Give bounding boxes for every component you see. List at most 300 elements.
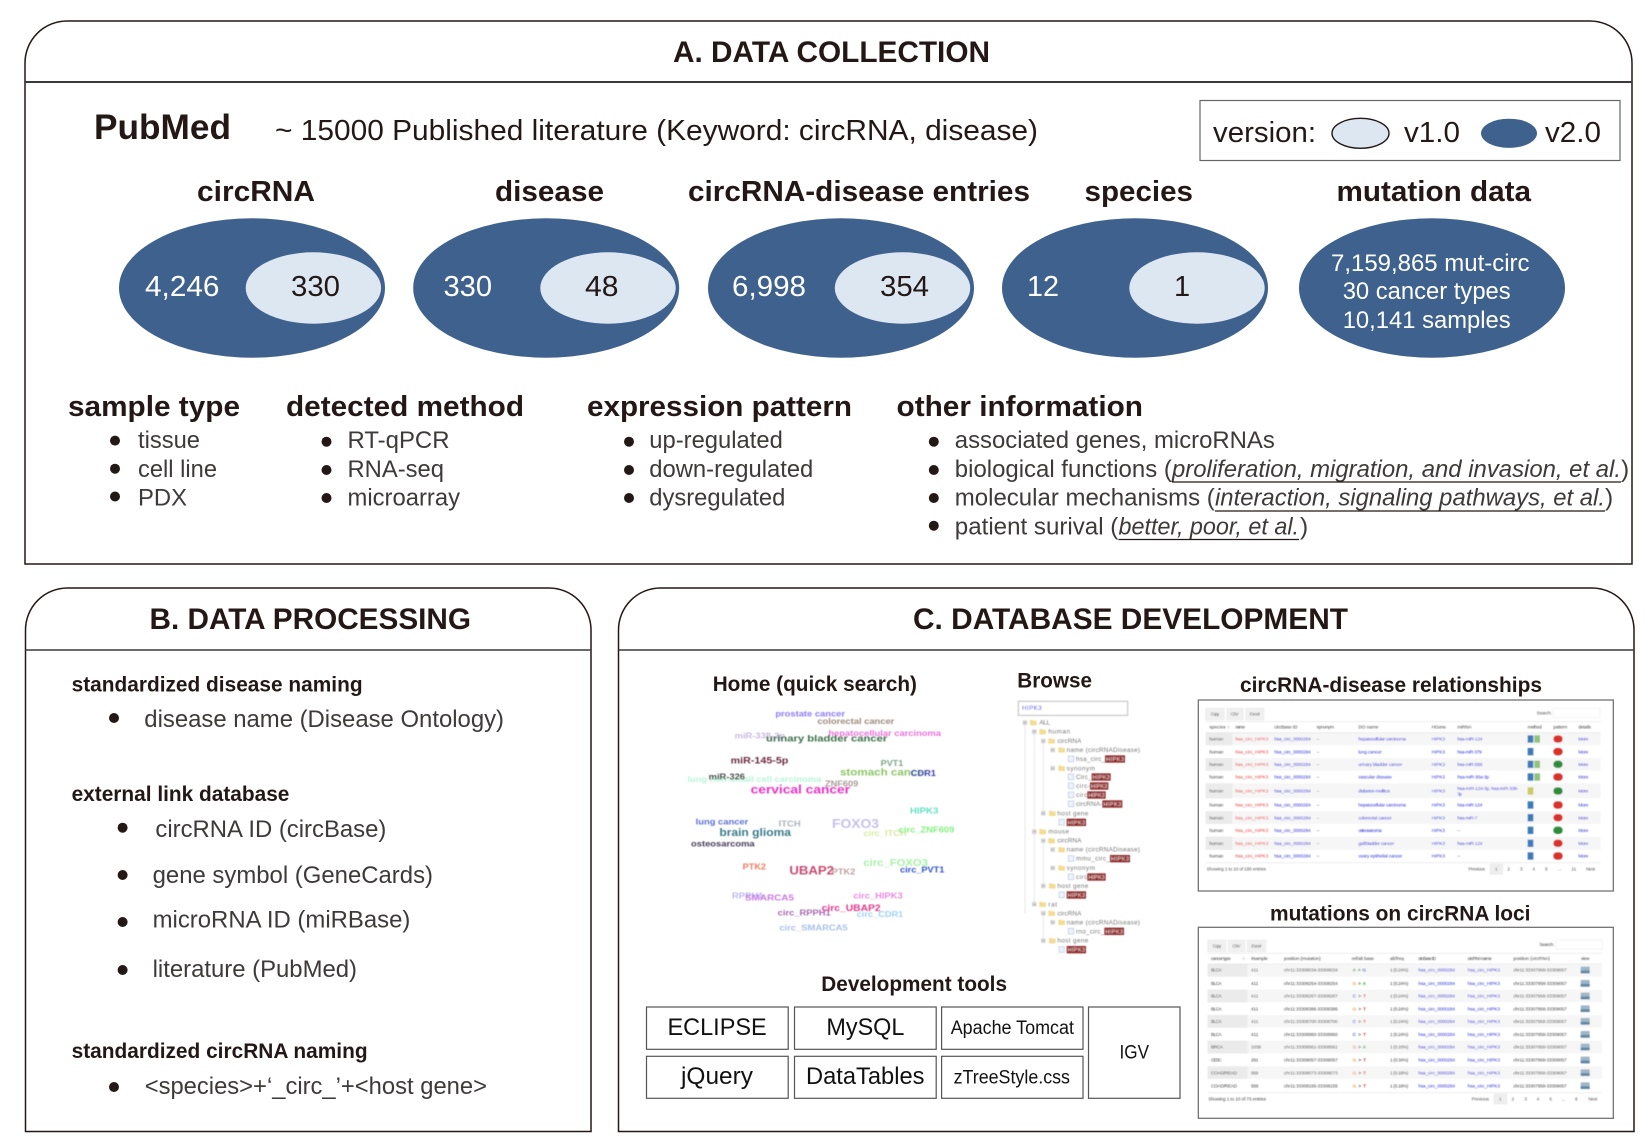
word cloud: PVT1 — [881, 758, 904, 768]
table screenshot: circRNA-disease relationships: hsa-miR-124 — [1457, 803, 1483, 808]
table screenshot: circRNA-disease relationships: human — [1209, 803, 1224, 808]
list: other information: biological functions ( — [955, 456, 1173, 483]
table screenshot: mutations on circRNA loci: hsa_circ_HIPK3 — [1468, 1045, 1500, 1050]
browse tree screenshot: HIPK3 — [1022, 705, 1042, 712]
word cloud: stomach cancer — [840, 767, 928, 778]
table screenshot: circRNA-disease relationships: More — [1578, 762, 1589, 767]
list: other information: interaction, signaling pathways, et al. — [1215, 484, 1605, 512]
stat: mutation data: 10,141 samples — [1343, 307, 1511, 334]
table screenshot: mutations on circRNA loci: BLCA — [1211, 994, 1223, 999]
heading: circRNA-disease relationships: circRNA-disease relationships — [1240, 674, 1542, 697]
panel A frame — [25, 21, 1632, 564]
table screenshot: mutations on circRNA loci: 1 (0.24%) — [1390, 1006, 1409, 1011]
table screenshot: mutations on circRNA loci: C > T — [1353, 1019, 1366, 1024]
table screenshot: circRNA-disease relationships: More — [1578, 854, 1589, 859]
table screenshot: mutations on circRNA loci: hsa_circ_HIPK3 — [1468, 994, 1500, 999]
table screenshot: circRNA-disease relationships: – — [1457, 828, 1460, 833]
table screenshot: mutations on circRNA loci: BLCA — [1211, 981, 1223, 986]
table screenshot: mutations on circRNA loci: G > T — [1353, 1070, 1366, 1075]
browse tree screenshot: circ — [1076, 874, 1087, 881]
table screenshot: circRNA-disease relationships: 11 — [1571, 866, 1577, 871]
list: expression pattern: down-regulated — [649, 456, 813, 483]
legend: version: version: — [1213, 117, 1316, 149]
word cloud: miR-145-5p — [731, 755, 789, 765]
panel: A. data collection — [25, 21, 1632, 564]
browse tree screenshot: circRNA — [1057, 838, 1082, 845]
table screenshot: mutations on circRNA loci: chr11:33308267-33308267 — [1284, 994, 1338, 999]
stat: circRNA-disease entries: circRNA-disease entries — [688, 176, 1030, 208]
table screenshot: mutations on circRNA loci: Excel — [1251, 943, 1261, 948]
table screenshot: circRNA-disease relationships: More — [1578, 775, 1589, 780]
browse tree screenshot: host gene — [1057, 938, 1089, 945]
word cloud: brain glioma — [719, 827, 791, 839]
list: expression pattern: up-regulated — [649, 427, 783, 454]
browse tree screenshot: name (circRNADisease) — [1067, 847, 1140, 854]
table screenshot: circRNA-disease relationships: – — [1317, 775, 1320, 780]
stat: circRNA-disease entries: 354 — [880, 271, 929, 303]
tool labels: ECLIPSE — [668, 1014, 767, 1041]
table screenshot: mutations on circRNA loci: hsa_circ_HIPK3 — [1468, 1070, 1500, 1075]
table screenshot: circRNA-disease relationships: human — [1209, 762, 1224, 767]
word cloud: hepatocellular carcinoma — [828, 729, 942, 738]
word cloud: circ_UBAP2 — [822, 903, 881, 913]
list: other information: molecular mechanisms ( — [955, 484, 1216, 512]
stat: disease: 48 — [585, 271, 618, 303]
list: sample type: PDX — [138, 484, 187, 512]
table screenshot: mutations on circRNA loci: 559 — [1251, 1070, 1259, 1075]
table screenshot: mutations on circRNA loci: hsa_circ_0000284 — [1418, 981, 1455, 986]
table screenshot: circRNA-disease relationships: hsa_circ_HIPK3 — [1235, 749, 1269, 754]
stat: mutation data: 30 cancer types — [1343, 278, 1511, 305]
table screenshot: circRNA-disease relationships: hsa_circ_HIPK3 — [1235, 815, 1269, 820]
table screenshot: mutations on circRNA loci: hsa_circ_0000284 — [1418, 1019, 1455, 1024]
table screenshot: circRNA-disease relationships: miRNA — [1457, 724, 1473, 729]
list: other information — [896, 391, 1629, 540]
table screenshot: circRNA-disease relationships: More — [1578, 828, 1589, 833]
table screenshot: mutations on circRNA loci: G > A — [1353, 1045, 1367, 1050]
table screenshot: circRNA-disease relationships: – — [1317, 749, 1320, 754]
browse tree screenshot: host gene — [1057, 810, 1089, 817]
word cloud: SMARCA5 — [745, 893, 794, 903]
table screenshot: mutations on circRNA loci: 1 (0.24%) — [1390, 994, 1409, 999]
stat: circRNA: 330 — [291, 271, 340, 303]
word cloud: cervical cancer — [751, 782, 850, 796]
table screenshot: mutations on circRNA loci: 1 — [1499, 1096, 1502, 1101]
table screenshot: circRNA-disease relationships: 3p — [1457, 791, 1462, 796]
browse tree screenshot: HIPK3 — [1105, 929, 1123, 935]
table screenshot: circRNA-disease relationships: HGene — [1432, 724, 1446, 729]
group: standardized circRNA naming: <species>+‘_circ_’+<host gene> — [145, 1073, 487, 1100]
table screenshot: mutations on circRNA loci: 1 (0.24%) — [1390, 981, 1409, 986]
table screenshot: mutations on circRNA loci: position (mutation) — [1284, 956, 1321, 961]
table screenshot: circRNA-disease relationships: human — [1209, 789, 1224, 794]
word cloud: lung cancer — [696, 818, 748, 827]
table screenshot: mutations on circRNA loci: C > T — [1353, 1032, 1366, 1037]
table screenshot: circRNA-disease relationships: hsa_circ_0000284 — [1274, 854, 1311, 859]
table screenshot: mutations on circRNA loci: 411 — [1251, 981, 1259, 986]
table screenshot: mutations on circRNA loci: hsa_circ_HIPK3 — [1468, 1083, 1500, 1088]
table screenshot: mutations on circRNA loci: COAD/READ — [1211, 1070, 1238, 1075]
list: sample type: tissue — [138, 427, 200, 454]
table screenshot: circRNA-disease relationships: 5 — [1545, 866, 1548, 871]
word cloud: PTK2 — [743, 862, 766, 872]
table screenshot: circRNA-disease relationships: HIPK3 — [1432, 854, 1445, 859]
list: sample type: sample type — [68, 391, 240, 423]
table screenshot: mutations on circRNA loci: Search: — [1539, 942, 1554, 947]
table screenshot: circRNA-disease relationships: Next — [1586, 866, 1596, 871]
group: standardized disease naming: standardized disease naming — [72, 674, 363, 696]
table screenshot: circRNA-disease relationships: – — [1457, 854, 1460, 859]
table screenshot: circRNA-disease relationships: 2 — [1507, 866, 1510, 871]
word cloud: circ_HIPK3 — [853, 892, 903, 901]
browse tree screenshot: hsa_circ_ — [1076, 756, 1105, 763]
table screenshot: mutations on circRNA loci: G > T — [1353, 1058, 1366, 1063]
legend: version: v1.0 — [1404, 117, 1460, 149]
list: expression pattern: expression pattern — [587, 391, 852, 423]
word cloud — [687, 710, 955, 932]
group: standardized circRNA naming — [72, 1040, 487, 1100]
literature summary: ~ 15000 Published literature (Keyword: circRNA, disease) — [275, 115, 1038, 147]
table screenshot: mutations on circRNA loci: 411 — [1251, 968, 1259, 973]
table screenshot: mutations on circRNA loci: hsa_circ_HIPK3 — [1468, 1032, 1500, 1037]
group: external link database — [72, 783, 433, 983]
browse tree screenshot: rat — [1048, 901, 1057, 908]
table screenshot: circRNA-disease relationships: 1 — [1495, 866, 1498, 871]
word cloud: UBAP2 — [789, 864, 834, 878]
table screenshot: circRNA-disease relationships: HIPK3 — [1432, 803, 1445, 808]
group: standardized disease naming: disease name (Disease Ontology) — [144, 706, 504, 733]
table screenshot: mutations on circRNA loci: hsa_circ_0000284 — [1418, 1083, 1455, 1088]
table screenshot: mutations on circRNA loci: Copy — [1213, 943, 1222, 948]
table screenshot: mutations on circRNA loci: 1039 — [1251, 1045, 1261, 1050]
table screenshot: circRNA-disease relationships: ... — [1558, 866, 1562, 871]
table screenshot: mutations on circRNA loci: 411 — [1251, 1006, 1259, 1011]
table screenshot: mutations on circRNA loci: hsa_circ_HIPK3 — [1468, 968, 1500, 973]
browse tree screenshot: mmu_circ_ — [1076, 856, 1110, 863]
table screenshot: mutations on circRNA loci: hsa_circ_HIPK3 — [1468, 1058, 1500, 1063]
browse tree screenshot: circ- — [1076, 783, 1090, 790]
table screenshot: circRNA-disease relationships: – — [1317, 737, 1320, 742]
table screenshot: mutations on circRNA loci: chr11:33307958-33309057 — [1513, 1006, 1567, 1011]
list: detected method: RNA-seq — [348, 456, 444, 483]
heading: Browse: Browse — [1017, 668, 1092, 692]
table screenshot: mutations on circRNA loci: ref/alt base — [1352, 956, 1374, 961]
table screenshot: mutations on circRNA loci: BLCA — [1211, 1006, 1223, 1011]
table screenshot: circRNA-disease relationships: hsa_circ_0000284 — [1274, 775, 1311, 780]
table screenshot: circRNA-disease relationships: name — [1235, 724, 1245, 729]
list: sample type: cell line — [138, 456, 217, 483]
panel C frame — [618, 588, 1634, 1132]
table screenshot: mutations on circRNA loci: 559 — [1251, 1083, 1259, 1088]
list: detected method — [286, 391, 524, 512]
table screenshot: circRNA-disease relationships: species ↑ — [1209, 724, 1229, 729]
table screenshot: circRNA-disease relationships: More — [1578, 749, 1589, 754]
stat: mutation data: 7,159,865 mut-circ — [1331, 250, 1530, 277]
heading: mutations on circRNA loci: mutations on circRNA loci — [1270, 902, 1530, 926]
browse tree screenshot: HIPK3 — [1106, 757, 1124, 763]
table screenshot: circRNA-disease relationships: human — [1209, 737, 1224, 742]
table screenshot: circRNA-disease relationships: details — [1578, 724, 1592, 729]
browse tree screenshot: ALL — [1039, 720, 1050, 727]
table screenshot: circRNA-disease relationships: HIPK3 — [1432, 789, 1445, 794]
table screenshot: mutations on circRNA loci: hsa_circ_0000284 — [1418, 994, 1455, 999]
table screenshot: circRNA-disease relationships: HIPK3 — [1432, 749, 1445, 754]
table screenshot: mutations on circRNA loci: chr11:33308960-33308960 — [1284, 1032, 1338, 1037]
table screenshot: circRNA-disease relationships: hsa_circ_HIPK3 — [1235, 775, 1269, 780]
group: external link database: literature (PubMed) — [153, 956, 357, 983]
table screenshot: mutations on circRNA loci: hsa_circ_HIPK3 — [1468, 1006, 1500, 1011]
table screenshot: mutations on circRNA loci: Previous — [1472, 1096, 1490, 1101]
table screenshot: mutations on circRNA loci: 411 — [1251, 1032, 1259, 1037]
table screenshot: circRNA-disease relationships: – — [1317, 815, 1320, 820]
table screenshot: mutations on circRNA loci: chr11:33307958-33309057 — [1513, 968, 1567, 973]
table screenshot: mutations on circRNA loci: ↑ — [1243, 956, 1245, 961]
table screenshot: mutations on circRNA loci: chr11:33308073-33308073 — [1284, 1070, 1338, 1075]
table screenshot: mutations on circRNA loci: 291 — [1251, 1058, 1259, 1063]
table screenshot: circRNA-disease relationships: hsa-miR-30a-3p — [1457, 775, 1489, 780]
table screenshot: circRNA-disease relationships: hsa_circ_HIPK3 — [1235, 803, 1269, 808]
table screenshot: circRNA-disease relationships: DO name — [1358, 724, 1379, 729]
browse tree screenshot: circRNA- — [1076, 801, 1102, 808]
table screenshot: circRNA-disease relationships: HIPK3 — [1432, 762, 1445, 767]
tool labels: zTreeStyle.css — [954, 1068, 1070, 1088]
word cloud: miR-326 — [709, 772, 746, 781]
table screenshot: mutations on circRNA loci: #sample — [1251, 956, 1268, 961]
browse tree screenshot: HIPK3 — [1091, 784, 1107, 790]
table screenshot: mutations on circRNA loci: chr11:33307958-33309057 — [1513, 1058, 1567, 1063]
group: standardized disease naming — [72, 674, 504, 733]
table screenshot: circRNA-disease relationships: vascular disease — [1358, 775, 1392, 780]
browse tree screenshot: Circ_ — [1076, 774, 1092, 781]
table screenshot: mutations on circRNA loci: chr11:33308700-33308700 — [1284, 1019, 1338, 1024]
table screenshot: circRNA-disease relationships: hsa-miR-379 — [1457, 749, 1482, 754]
browse tree screenshot: circRNA — [1057, 738, 1082, 745]
browse tree screenshot: HIPK3 — [1111, 857, 1129, 863]
table screenshot: circRNA-disease relationships: hsa_circ_0000284 — [1274, 815, 1311, 820]
table screenshot: mutations on circRNA loci: ... — [1561, 1096, 1565, 1101]
table screenshot: mutations on circRNA loci: C > T — [1353, 994, 1366, 999]
table screenshot: circRNA-disease relationships: hsa-miR-124 — [1457, 737, 1483, 742]
word cloud: circ_CDR1 — [857, 910, 904, 919]
word cloud: circ_ITCH — [863, 829, 907, 838]
table screenshot: mutations on circRNA loci: hsa_circ_0000284 — [1418, 1006, 1455, 1011]
table screenshot: mutations on circRNA loci: 411 — [1251, 994, 1259, 999]
word cloud: RPPH1 — [732, 892, 764, 901]
table screenshot: circRNA-disease relationships: hsa-miR-558 — [1457, 762, 1483, 767]
table screenshot: mutations on circRNA loci: chr11:33307958-33309057 — [1513, 981, 1567, 986]
table screenshot: mutations on circRNA loci: 4 — [1537, 1096, 1540, 1101]
table screenshot: mutations on circRNA loci: chr11:33307958-33309057 — [1513, 1070, 1567, 1075]
stat: circRNA: 4,246 — [145, 271, 220, 303]
list: other information: better, poor, et al. — [1118, 514, 1299, 540]
table screenshot: mutations on circRNA loci: hsa_circ_0000284 — [1418, 1070, 1455, 1075]
table screenshot: circRNA-disease relationships: hsa_circ_0000284 — [1274, 749, 1311, 754]
browse tree screenshot: HIPK3 — [1088, 875, 1105, 881]
table screenshot: circRNA-disease relationships: – — [1317, 762, 1320, 767]
browse tree screenshot: host gene — [1057, 883, 1089, 890]
tool boxes — [646, 1007, 1180, 1098]
browse tree screenshot: circRNA — [1057, 910, 1082, 917]
word cloud: circ_FOXO3 — [863, 858, 928, 869]
panel B frame — [26, 588, 591, 1132]
table screenshot: mutations on circRNA loci: 1 (0.34%) — [1390, 1058, 1409, 1063]
table screenshot: mutations on circRNA loci: chr11:33307958-33309057 — [1513, 1045, 1567, 1050]
word cloud: osteosarcoma — [691, 840, 755, 849]
table screenshot: circRNA-disease relationships: method — [1528, 724, 1542, 729]
table screenshot: mutations on circRNA loci: 1 (0.24%) — [1390, 968, 1409, 973]
table screenshot: circRNA-disease relationships: human — [1209, 828, 1224, 833]
heading: A. DATA COLLECTION: A. DATA COLLECTION — [673, 36, 990, 69]
table screenshot: mutations on circRNA loci: 1 (0.18%) — [1390, 1070, 1409, 1075]
group: external link database: external link database — [72, 783, 289, 806]
table screenshot: mutations on circRNA loci: cancer type — [1211, 956, 1231, 961]
list: other information: other information — [896, 391, 1143, 423]
list: other information: ) — [1621, 456, 1629, 483]
table screenshot: mutations on circRNA loci: alt/freq — [1390, 956, 1404, 961]
table screenshot: circRNA-disease relationships: hsa_circ_HIPK3 — [1235, 841, 1269, 846]
table screenshot: circRNA-disease relationships: – — [1317, 854, 1320, 859]
table screenshot: mutations on circRNA loci: BLCA — [1211, 1019, 1223, 1024]
list: other information: ) — [1300, 514, 1308, 540]
table screenshot: circRNA-disease relationships: human — [1209, 775, 1224, 780]
stat: circRNA: circRNA — [197, 176, 315, 208]
table screenshot: mutations on circRNA loci: chr11:33308561-33308561 — [1284, 1045, 1338, 1050]
browse tree screenshot: HIPK3 — [1103, 802, 1121, 808]
word cloud: miR-338-3p — [735, 732, 785, 741]
list: expression pattern: dysregulated — [649, 484, 785, 512]
table screenshot: circRNA-disease relationships: urinary bladder cancer — [1358, 762, 1403, 767]
word cloud: CDR1 — [911, 769, 937, 778]
panel: B. data processing — [26, 588, 591, 1132]
browse tree screenshot: synonym — [1067, 765, 1095, 772]
table screenshot: circRNA-disease relationships: Excel — [1250, 712, 1260, 717]
table screenshot: circRNA-disease relationships: More — [1578, 803, 1589, 808]
table screenshot: circRNA-disease relationships: hsa_circ_HIPK3 — [1235, 789, 1269, 794]
table screenshot: circRNA-disease relationships: gallbladder cancer — [1358, 841, 1395, 846]
stat: disease: 330 — [444, 271, 492, 303]
table screenshot: circRNA-disease relationships: hsa_circ_0000284 — [1274, 789, 1311, 794]
stat: mutation data: mutation data — [1336, 176, 1532, 208]
word cloud: ITCH — [779, 819, 801, 828]
stat: circRNA-disease entries — [688, 176, 1030, 358]
table screenshot: circRNA-disease relationships: colorectal cancer — [1358, 815, 1392, 820]
table screenshot: circRNA-disease relationships: HIPK3 — [1432, 841, 1445, 846]
list: detected method: microarray — [348, 484, 461, 512]
table screenshot: mutations on circRNA loci: BLCA — [1211, 1032, 1223, 1037]
table screenshot: circRNA-disease relationships: – — [1317, 841, 1320, 846]
table screenshot: mutations on circRNA loci: circRNA name — [1468, 956, 1492, 961]
browse tree screenshot: HIPK3 — [1068, 820, 1085, 826]
table screenshot: circRNA-disease relationships: osteosarcoma — [1358, 828, 1382, 833]
stat: circRNA — [119, 176, 385, 358]
legend: version: v2.0 — [1545, 117, 1601, 149]
table screenshot: circRNA-disease relationships: HIPK3 — [1432, 775, 1445, 780]
table screenshot: mutations on circRNA loci: 2 — [1512, 1096, 1515, 1101]
browse tree screenshot: HIPK3 — [1088, 793, 1105, 799]
table screenshot: circRNA-disease relationships: CSV — [1231, 712, 1240, 717]
browse tree screenshot: mouse — [1048, 829, 1069, 836]
tool labels: Apache Tomcat — [951, 1018, 1075, 1039]
table screenshot: mutations on circRNA loci: chr11:33307958-33309057 — [1513, 1032, 1567, 1037]
table screenshot: mutations on circRNA loci: 3 — [1524, 1096, 1527, 1101]
table screenshot: mutations on circRNA loci: 1 (0.24%) — [1390, 1032, 1409, 1037]
table screenshot: circRNA-disease relationships: circBase ID — [1274, 724, 1298, 729]
word cloud: colorectal cancer — [817, 717, 894, 726]
browse tree screenshot: synonym — [1067, 865, 1095, 872]
stat: species: species — [1084, 176, 1193, 208]
table screenshot: mutations on circRNA loci: Showing 1 to 10 of 73 entries — [1208, 1096, 1267, 1101]
group: external link database: circRNA ID (circBase) — [155, 816, 386, 843]
table screenshot: circRNA-disease relationships: hsa_circ_0000284 — [1274, 803, 1311, 808]
list: other information: associated genes, microRNAs — [955, 427, 1275, 454]
table screenshot: mutations on circRNA loci: chr11:33308057-33308057 — [1284, 1058, 1338, 1063]
table screenshot: circRNA-disease relationships: lung cancer — [1358, 749, 1382, 754]
group: external link database: microRNA ID (miRBase) — [153, 907, 410, 934]
table screenshot: circRNA-disease relationships: HIPK3 — [1432, 737, 1445, 742]
browse tree screenshot: circ — [1076, 792, 1087, 799]
table screenshot: circRNA-disease relationships: Showing 1 to 10 of 190 entries — [1207, 866, 1267, 871]
table screenshot: mutations on circRNA loci: 1 (0.10%) — [1390, 1045, 1409, 1050]
list: sample type — [68, 391, 240, 512]
tool labels: DataTables — [806, 1063, 924, 1090]
table screenshot: mutations on circRNA loci: chr11:33308155-33308155 — [1284, 1083, 1338, 1088]
table screenshot: circRNA-disease relationships: human — [1209, 815, 1224, 820]
table screenshot: mutations on circRNA loci: hsa_circ_HIPK3 — [1468, 1019, 1500, 1024]
table screenshot: circRNA-disease relationships: diabetes mellitus — [1358, 789, 1391, 794]
word cloud: circ_ZNF609 — [899, 825, 955, 834]
stat: species: 12 — [1027, 271, 1059, 303]
table screenshot: mutations on circRNA loci: chr11:33308034-33308034 — [1284, 968, 1338, 973]
browse tree screenshot: name (circRNADisease) — [1067, 919, 1140, 926]
table screenshot: circRNA-disease relationships: hsa_circ_0000284 — [1274, 828, 1311, 833]
table screenshot: mutations on circRNA loci: chr11:33308386-33308386 — [1284, 1006, 1338, 1011]
table screenshot: mutations on circRNA loci: circBase ID — [1418, 956, 1437, 961]
list: other information: proliferation, migration, and invasion, et al. — [1171, 456, 1621, 483]
table screenshot: circRNA-disease relationships: 4 — [1532, 866, 1535, 871]
word cloud: prostate cancer — [775, 710, 845, 719]
browse tree screenshot: HIPK3 — [1068, 948, 1085, 954]
table screenshot: circRNA-disease relationships: HIPK3 — [1432, 815, 1445, 820]
word cloud: lung non-small cell carcinoma — [687, 775, 822, 784]
table screenshot: circRNA-disease relationships: More — [1578, 815, 1589, 820]
table screenshot: mutations on circRNA loci: CESC — [1211, 1058, 1222, 1063]
table screenshot: circRNA-disease relationships: hsa_circ_HIPK3 — [1235, 737, 1269, 742]
heading: B. DATA PROCESSING: B. DATA PROCESSING — [150, 603, 471, 636]
table screenshot: circRNA-disease relationships: human — [1209, 749, 1224, 754]
tool labels: jQuery — [680, 1063, 754, 1090]
word cloud: urinary bladder cancer — [766, 734, 888, 744]
table screenshot: mutations on circRNA loci: hsa_circ_0000284 — [1418, 968, 1455, 973]
table screenshot: mutations on circRNA loci: hsa_circ_0000284 — [1418, 1045, 1455, 1050]
table screenshot: circRNA-disease relationships: – — [1317, 789, 1320, 794]
table screenshot: mutations on circRNA loci: G > T — [1353, 1006, 1366, 1011]
word cloud: HIPK3 — [910, 805, 939, 815]
table screenshot: mutations on circRNA loci: position (circRNA) — [1513, 956, 1550, 961]
table screenshot: mutations on circRNA loci — [1198, 927, 1613, 1118]
stat: mutation data — [1299, 176, 1565, 358]
browse tree screenshot: human — [1048, 729, 1070, 736]
table screenshot: circRNA-disease relationships: hsa_circ_HIPK3 — [1235, 828, 1269, 833]
development tools — [646, 973, 1180, 1098]
table screenshot: mutations on circRNA loci: hsa_circ_0000284 — [1418, 1058, 1455, 1063]
table screenshot: mutations on circRNA loci: BRCA — [1211, 1045, 1224, 1050]
word cloud: circ_SMARCA5 — [779, 923, 848, 932]
table screenshot: circRNA-disease relationships: human — [1209, 854, 1224, 859]
table screenshot: mutations on circRNA loci: G > A — [1353, 981, 1367, 986]
list: expression pattern — [587, 391, 852, 512]
table screenshot: circRNA-disease relationships: Copy — [1211, 712, 1220, 717]
table screenshot: mutations on circRNA loci: COAD/READ — [1211, 1083, 1238, 1088]
